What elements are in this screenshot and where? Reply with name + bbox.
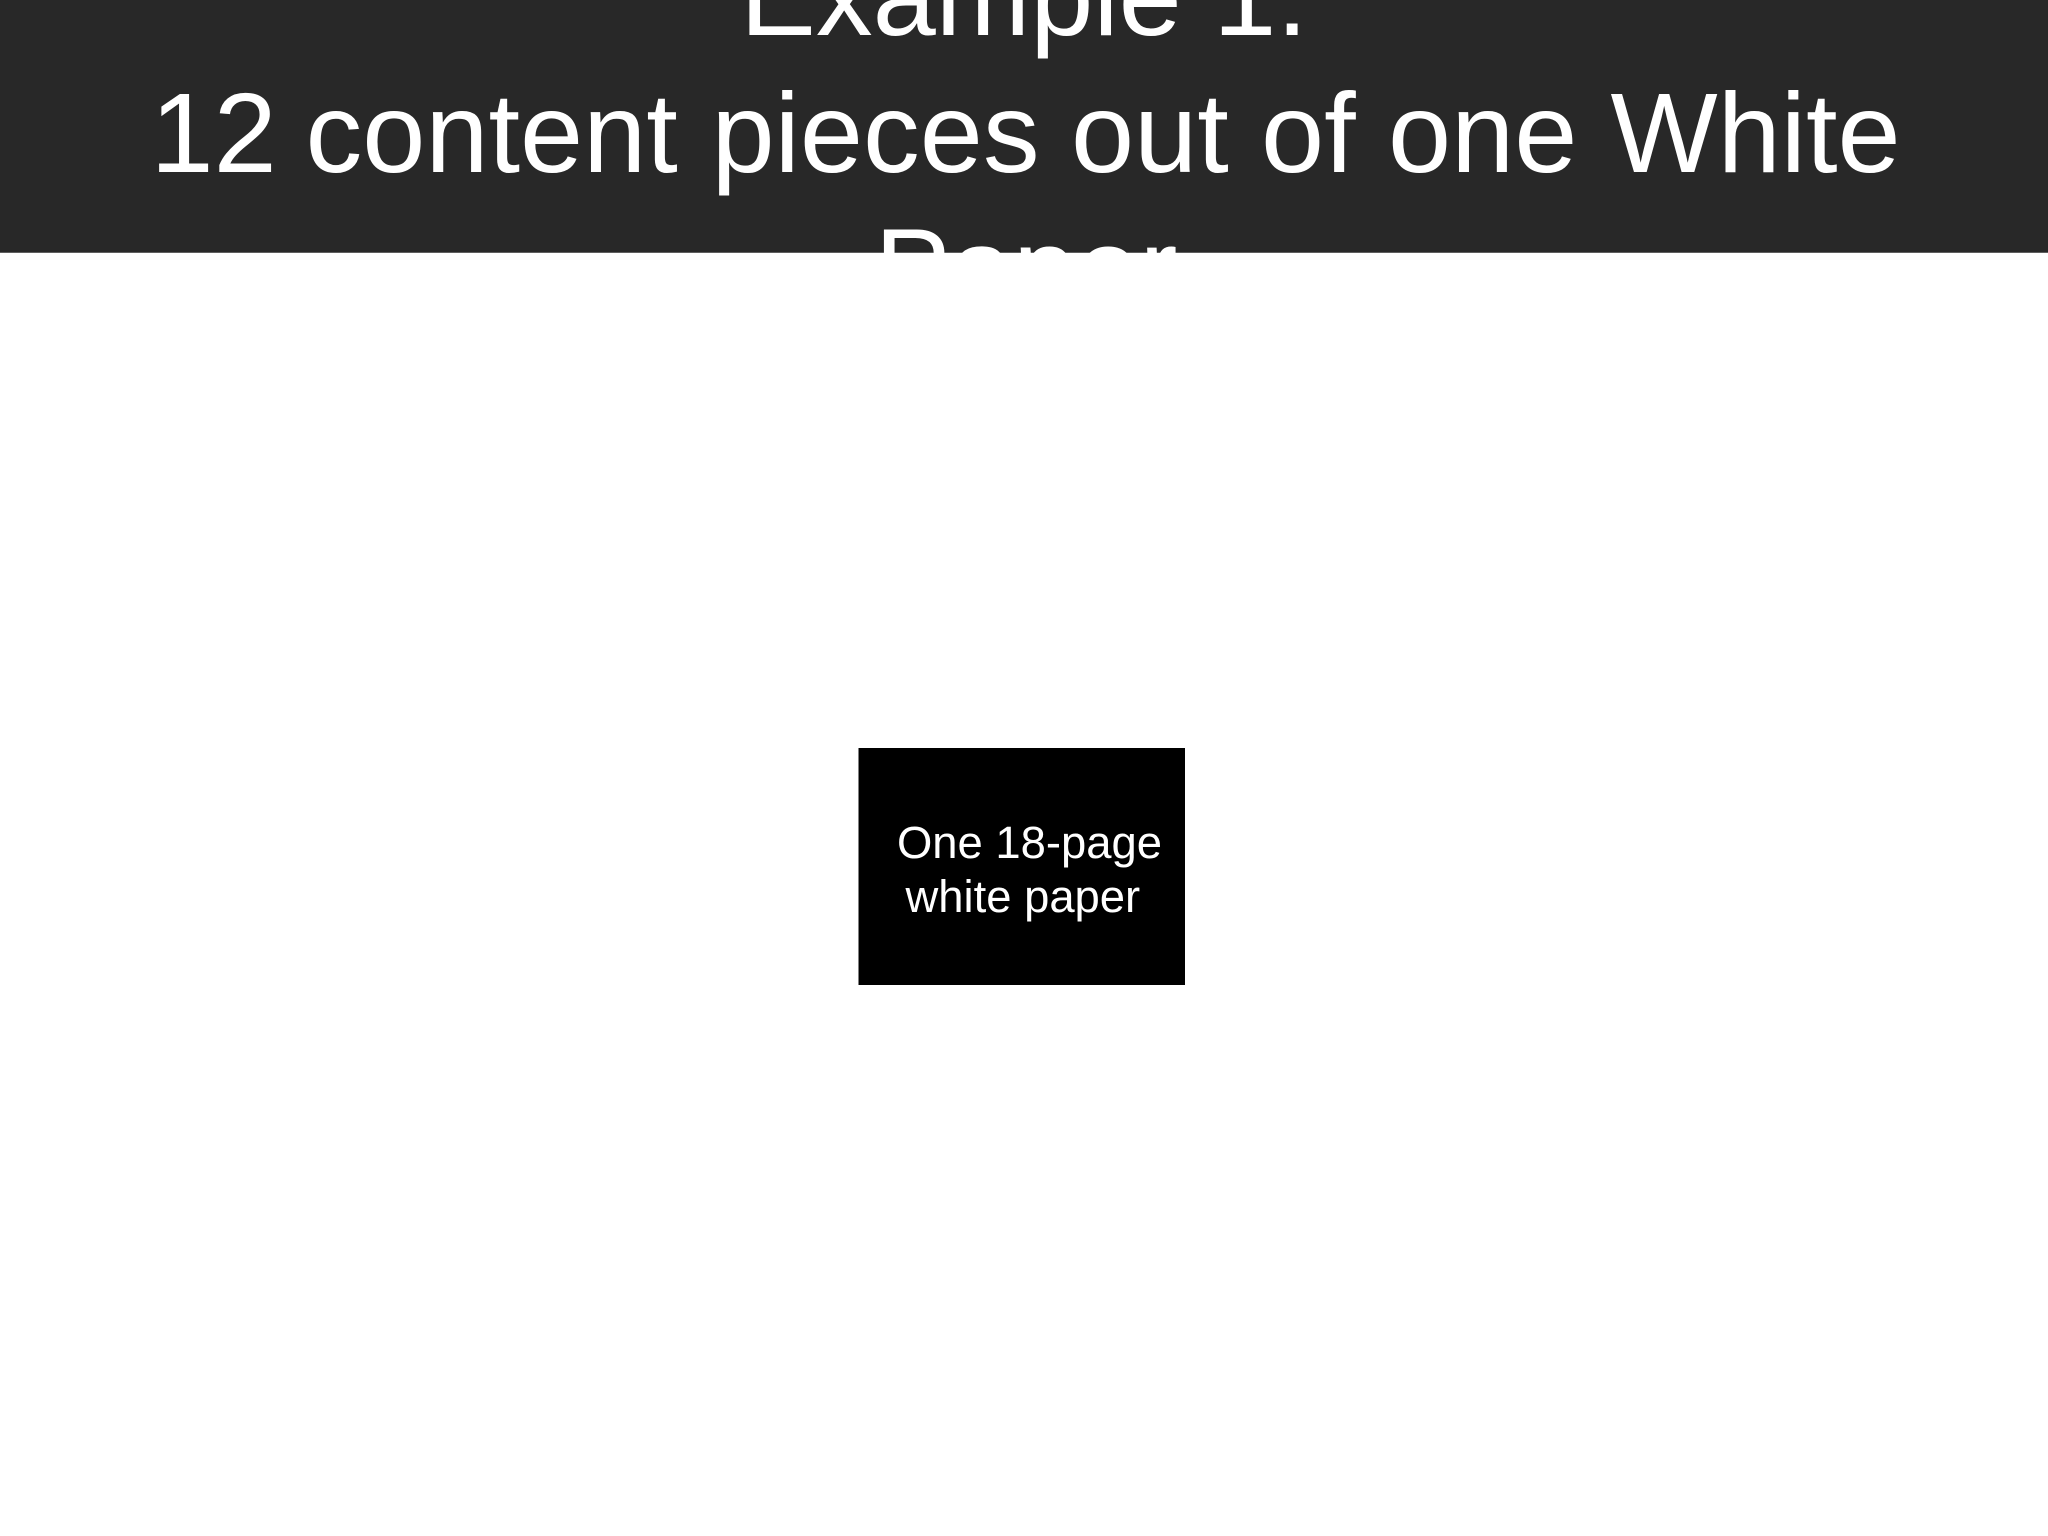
title: pieces — [712, 70, 1040, 197]
box label: white paper — [904, 871, 1140, 922]
header band — [0, 0, 2048, 253]
panel: white paper box — [858, 748, 1185, 985]
title: out — [1071, 70, 1229, 197]
box label: One 18-page — [897, 817, 1162, 868]
box label — [897, 817, 1162, 922]
title: of — [1261, 70, 1356, 197]
title: Paper — [875, 206, 1177, 332]
title: 12 — [150, 70, 277, 197]
title: content — [306, 70, 678, 197]
title: one — [1388, 70, 1577, 197]
title — [150, 0, 1901, 332]
title: White — [1610, 70, 1901, 197]
